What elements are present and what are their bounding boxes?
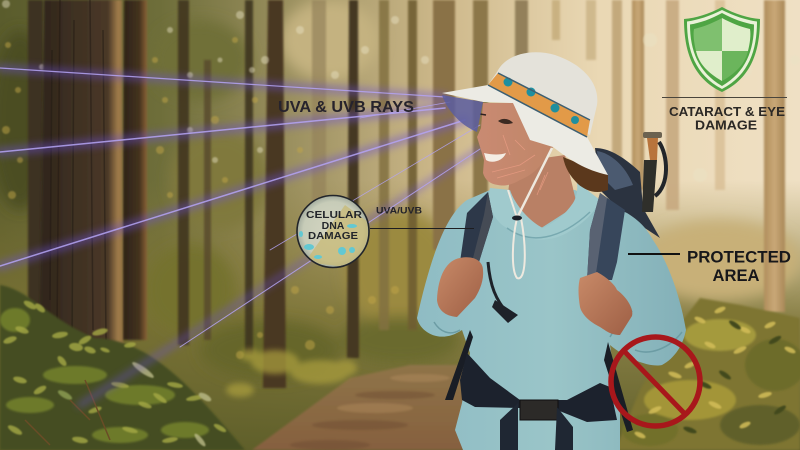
hip belt — [460, 353, 617, 422]
forest path — [252, 365, 470, 450]
label: cataract and eye damage: CATARACT & EYE — [669, 104, 785, 119]
icon: green shield — [684, 7, 760, 92]
background foliage speckles — [2, 0, 800, 359]
label: cataract and eye damage: DAMAGE — [695, 118, 757, 132]
callout: cellular DNA damage: DAMAGE — [308, 230, 358, 242]
backpack — [595, 148, 660, 238]
label: protected area: PROTECTED — [687, 248, 791, 266]
hat band — [488, 73, 590, 137]
hat — [488, 52, 597, 135]
leader line: protected area — [628, 253, 680, 255]
neck — [507, 155, 577, 232]
callout: cellular DNA damage: DNA — [322, 220, 345, 232]
divider line above caption — [662, 96, 787, 98]
smile — [484, 153, 506, 162]
dangling strap — [488, 262, 510, 316]
icon: prohibition sign — [611, 337, 700, 426]
large foreground trunk — [30, 0, 130, 400]
label: UVA/UVB: UVA/UVB — [376, 206, 422, 216]
hair — [563, 157, 608, 192]
right pack strap — [587, 193, 625, 280]
label: protected area — [687, 248, 791, 285]
trekking pole — [642, 132, 666, 212]
left hand — [437, 257, 483, 317]
torso shirt with arms — [417, 190, 686, 450]
label: UVA and UVB rays: UVA & UVB RAYS — [278, 99, 414, 116]
hiker — [417, 52, 686, 450]
leader line: UVA/UVB — [370, 228, 474, 230]
callout: cellular DNA damage — [297, 196, 372, 270]
left pack strap — [460, 192, 493, 262]
label: protected area: AREA — [712, 267, 760, 285]
callout: cellular DNA damage: CELULAR — [306, 209, 362, 221]
face — [477, 103, 553, 185]
label: cataract and eye damage — [669, 104, 785, 132]
left bushes — [0, 285, 357, 450]
right bushes — [615, 298, 800, 450]
vein overlay — [492, 135, 548, 195]
right hand — [578, 272, 632, 335]
UV rays — [0, 68, 480, 405]
eyes — [498, 119, 513, 124]
hood — [489, 182, 600, 240]
chin cord — [517, 148, 552, 218]
